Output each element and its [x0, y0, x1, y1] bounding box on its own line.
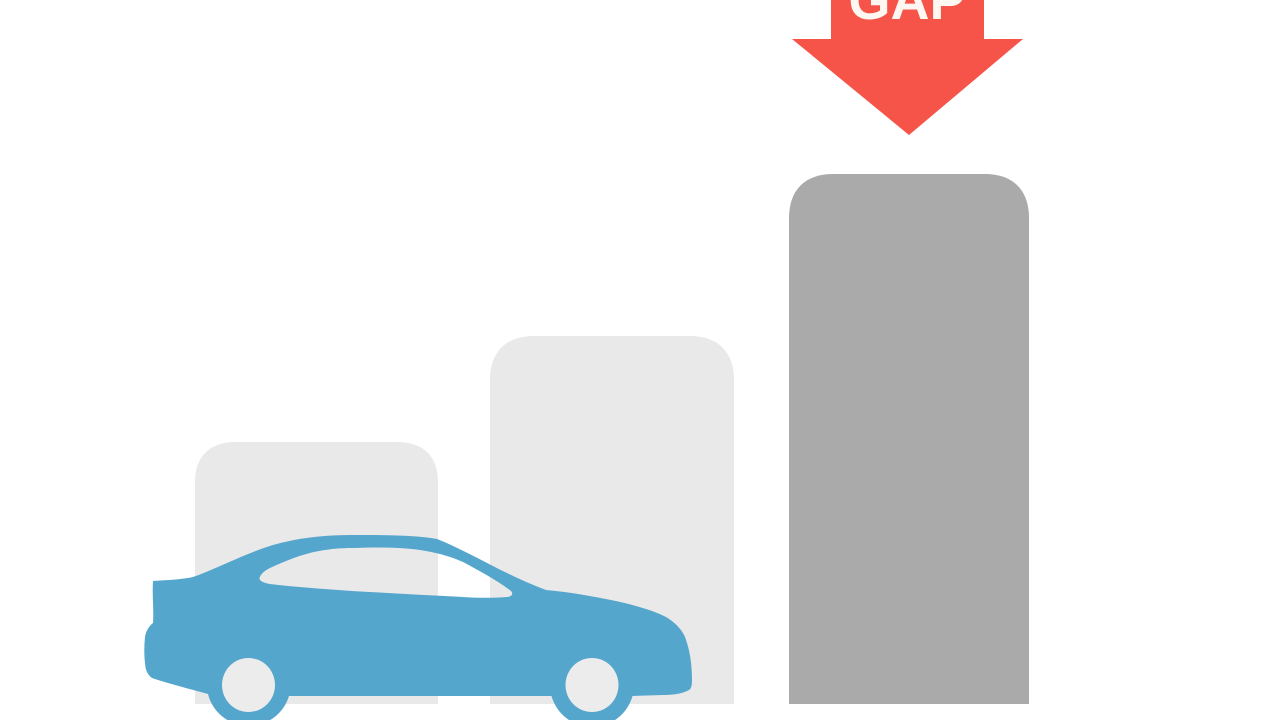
front wheel — [566, 658, 618, 712]
arrow with GAP label — [792, 0, 1023, 135]
bar 1: short light bar — [195, 442, 438, 704]
car body — [144, 535, 692, 720]
arrow shape — [792, 0, 1023, 135]
bar 3: tall dark bar — [789, 174, 1029, 704]
bar 2: medium light bar — [490, 336, 734, 704]
icon: blue car — [144, 535, 692, 720]
rear wheel — [222, 658, 275, 712]
